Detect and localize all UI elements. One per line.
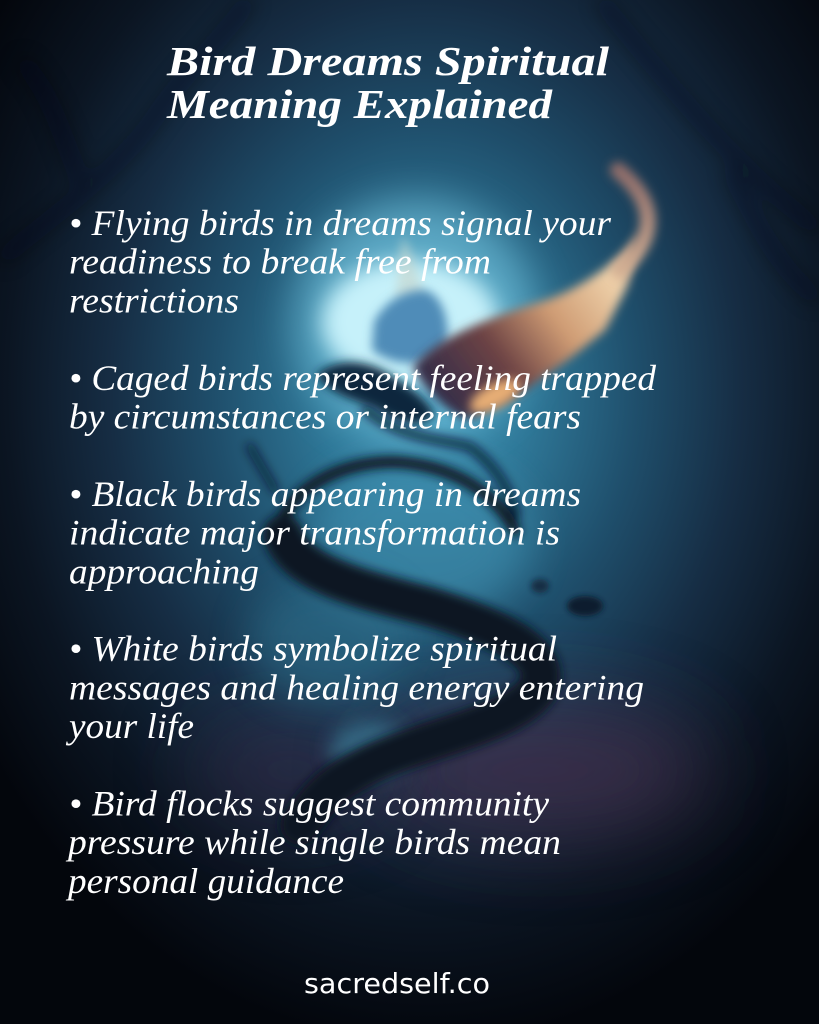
bullet: bird flocks: • Bird flocks suggest community bbox=[69, 784, 549, 824]
branches bbox=[250, 410, 541, 825]
bullet: bird flocks: personal guidance bbox=[65, 861, 344, 901]
bullet: caged birds bbox=[69, 358, 657, 436]
bird: body, head and wing bbox=[316, 170, 648, 423]
bullet: black birds bbox=[69, 474, 581, 591]
bullet: flying birds bbox=[69, 203, 612, 320]
title bbox=[166, 38, 610, 127]
bullet: caged birds: • Caged birds represent feeling trapped bbox=[69, 358, 657, 398]
bullet: flying birds: readiness to break free from bbox=[69, 242, 491, 282]
bullet: bird flocks bbox=[65, 784, 561, 901]
bullet: white birds: • White birds symbolize spiritual bbox=[69, 629, 557, 669]
title: Meaning Explained bbox=[166, 81, 553, 127]
footer: website: sacredself.co bbox=[304, 967, 490, 1000]
bullet: caged birds: by circumstances or internal fears bbox=[69, 396, 581, 436]
bullet: flying birds: restrictions bbox=[69, 280, 239, 320]
moon glow bbox=[322, 260, 498, 384]
bullet: white birds: your life bbox=[66, 706, 194, 746]
bullet: flying birds: • Flying birds in dreams signal your bbox=[69, 203, 612, 243]
bullet: white birds bbox=[66, 629, 644, 746]
bullet: black birds: • Black birds appearing in dreams bbox=[69, 474, 581, 514]
title: Bird Dreams Spiritual bbox=[166, 38, 610, 84]
bullet: bird flocks: pressure while single birds mean bbox=[65, 822, 561, 862]
small distant birds bbox=[531, 579, 603, 616]
bullet: white birds: messages and healing energy entering bbox=[69, 667, 644, 707]
bullet: black birds: approaching bbox=[69, 551, 259, 591]
bullet: black birds: indicate major transformation is bbox=[69, 513, 560, 553]
